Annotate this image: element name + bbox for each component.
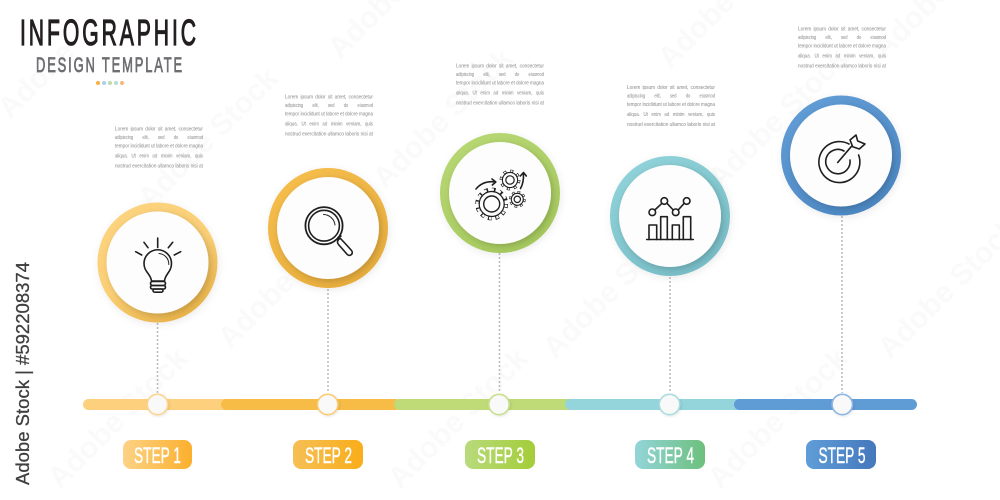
step 3 ring [440,133,560,253]
step 2 text: nostrud exercitation ullamco laboris nisi at [285,132,373,138]
step 1 text: tempor incididunt ut labore et dolore magna [115,144,204,150]
step 5 text: tempor incididunt ut labore et dolore magna [798,44,887,50]
step 4 inner disc [619,165,721,267]
step 5 badge [806,440,876,469]
icon: line and bar chart [647,198,693,240]
step 4 text: Lorem ipsum dolor sit amet, consectetur [627,85,715,91]
step 3 badge [465,440,535,469]
step 1 ring [98,202,218,322]
step 2 ring [268,168,388,288]
stock side label: Adobe Stock | #592208374 [13,262,33,485]
step 2 badge: STEP 2 [305,443,352,468]
icon: light bulb [136,238,181,292]
step 4 [610,85,730,469]
title block [20,12,199,85]
step 5 text: aliqua. Ut enim ad minim veniam, quis [798,54,886,60]
step 4 badge: STEP 4 [647,443,694,468]
watermark pattern: Adobe Stock [42,342,195,495]
watermark pattern: Adobe Stock [367,42,520,195]
step 2 [268,95,388,469]
step 3 badge: STEP 3 [477,443,524,468]
step 5 text: Lorem ipsum dolor sit amet, consectetur [798,27,886,33]
colour dots [96,81,124,85]
icon: gears with arrows [476,171,526,218]
watermark pattern: Adobe Stock [702,342,855,495]
step 4 text: nostrud exercitation ullamco laboris nisi at [627,122,715,128]
step 2 text: Lorem ipsum dolor sit amet, consectetur [285,95,373,101]
title: INFOGRAPHIC [20,12,199,53]
step 1 inner disc [106,212,208,314]
step 3 text: Lorem ipsum dolor sit amet, consectetur [456,64,544,70]
watermark pattern: Adobe Stock [702,42,855,195]
step 4 text: tempor incididunt ut labore et dolore magna [627,102,716,108]
timeline bar [83,399,917,410]
step 1 badge [123,440,192,469]
step 3 text [456,64,545,107]
step 4 text [627,85,716,128]
step 2 badge [293,440,363,469]
step 5 ring [781,96,901,216]
step 3 inner disc [449,142,551,244]
step 5 node [832,394,852,415]
step 4 text: adipiscing elit, sed do eiusmod [627,94,715,100]
watermark pattern: Adobe Stock [537,212,690,365]
step 1 text: adipiscing elit, sed do eiusmod [115,135,203,141]
step 1 node [147,394,168,415]
subtitle: DESIGN TEMPLATE [36,54,184,77]
step 2 text: tempor incididunt ut labore et dolore magna [285,112,374,118]
step 4 badge [635,440,705,469]
step 2 text: aliqua. Ut enim ad minim veniam, quis [285,122,373,128]
step 1 text [115,127,204,170]
step 3 text: tempor incididunt ut labore et dolore magna [456,81,545,87]
step 2 text [285,95,374,138]
step 2 inner disc [277,177,379,279]
step 5 text: adipiscing elit, sed do eiusmod [798,35,886,41]
step 5 text [798,27,887,70]
step 1 badge: STEP 1 [134,443,181,468]
step 1 text: aliqua. Ut enim ad minim veniam, quis [115,154,203,160]
step 3 text: nostrud exercitation ullamco laboris nisi at [456,101,544,107]
watermark pattern: Adobe Stock [212,202,365,355]
step 1 text: Lorem ipsum dolor sit amet, consectetur [115,127,203,133]
step 3 [440,64,560,469]
step 3 text: adipiscing elit, sed do eiusmod [456,72,544,78]
step 4 ring [610,156,730,276]
icon: target with arrow [819,135,865,183]
step 4 text: aliqua. Ut enim ad minim veniam, quis [627,112,715,118]
step 5 [781,27,901,469]
step 2 text: adipiscing elit, sed do eiusmod [285,103,373,109]
step 3 node [489,394,509,415]
step 1 text: nostrud exercitation ullamco laboris nisi at [115,164,203,170]
step 5 text: nostrud exercitation ullamco laboris nisi at [798,64,886,70]
icon: magnifying glass [305,207,352,255]
step 5 inner disc [790,104,892,206]
watermark pattern: Adobe Stock [382,342,535,495]
step 2 node [318,394,338,415]
step 5 badge: STEP 5 [818,443,866,468]
watermark pattern: Adobe Stock [132,62,285,215]
step 4 node [659,394,680,415]
step 1 [98,127,218,469]
dotted connectors [158,216,842,393]
step 3 text: aliqua. Ut enim ad minim veniam, quis [456,91,544,97]
